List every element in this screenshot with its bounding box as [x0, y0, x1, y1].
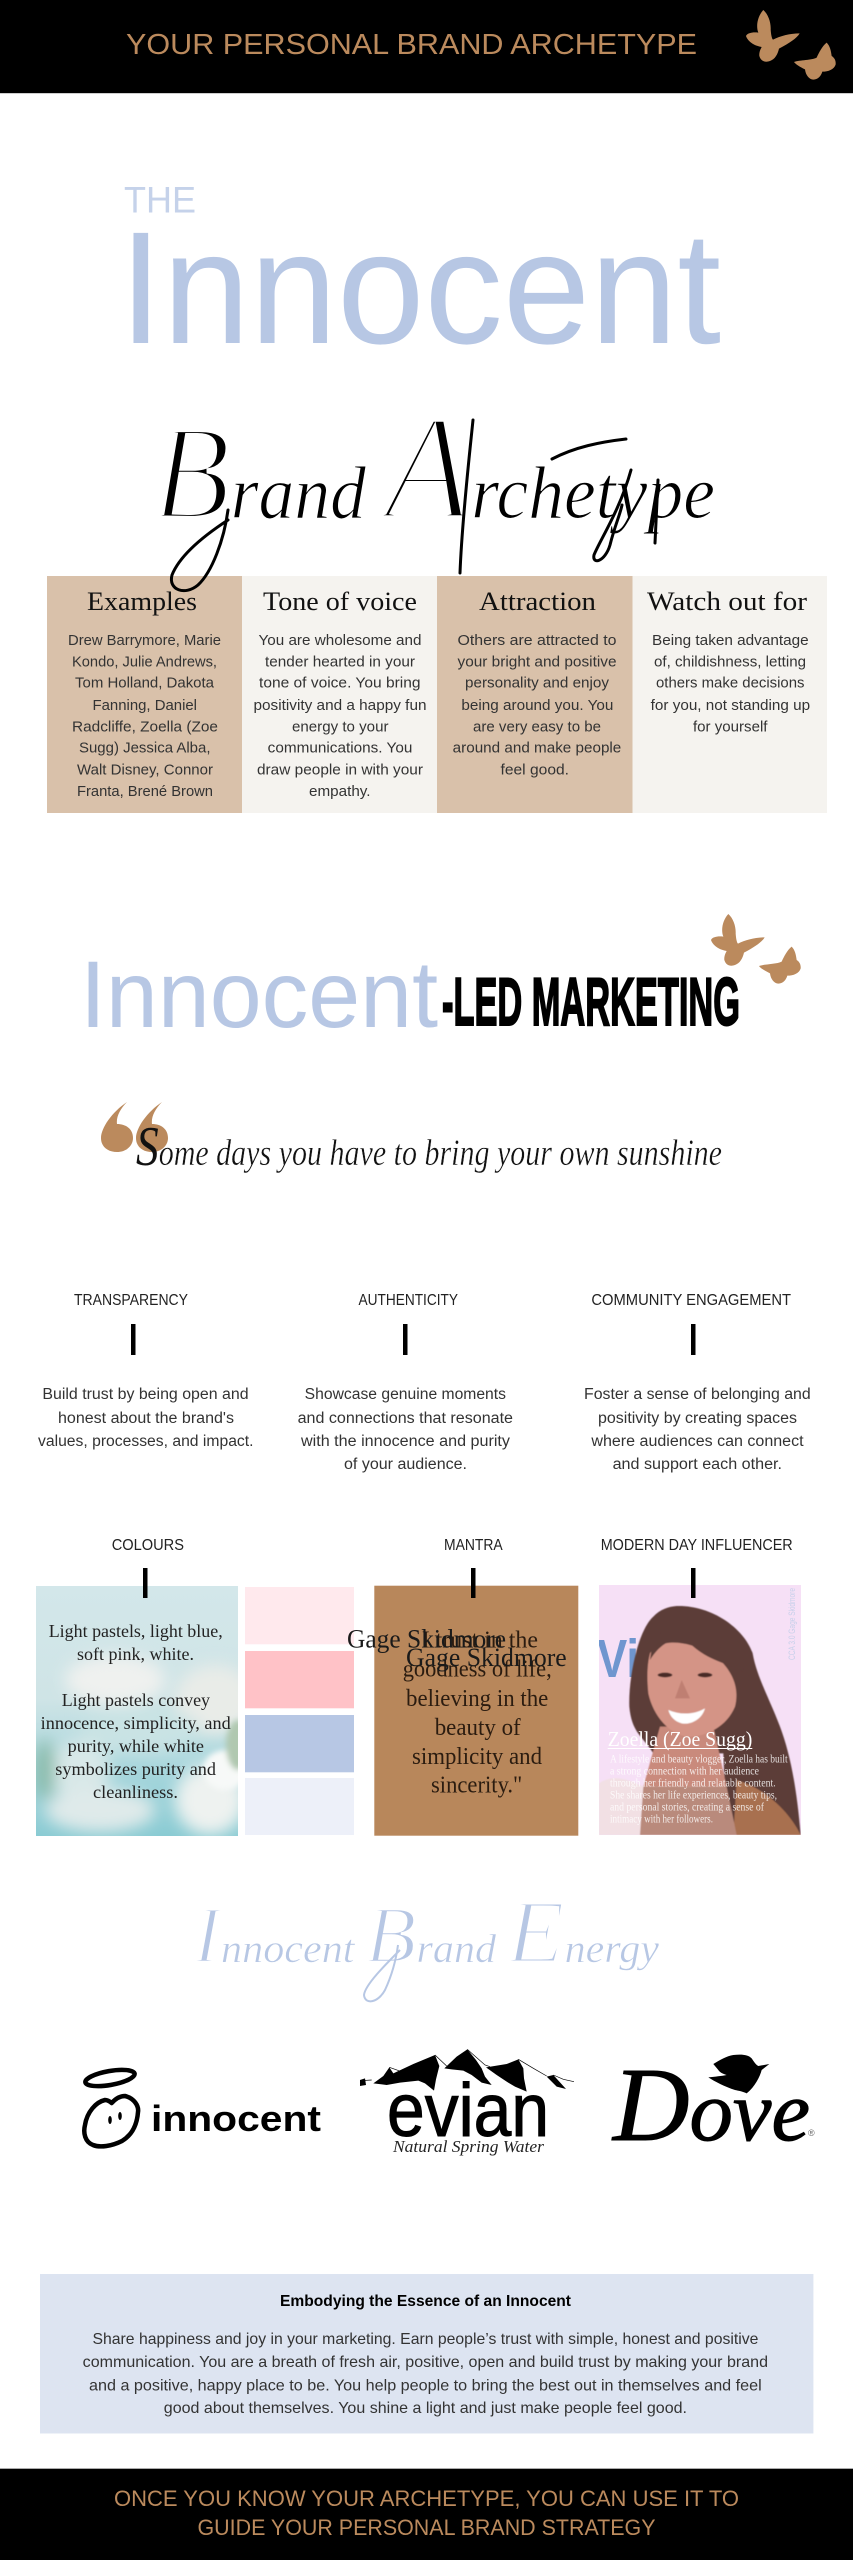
column: tone of voice: tender hearted in your	[265, 653, 415, 670]
panel body: communication. You are a breath of fresh air, positive, open and build trust by making your brand	[83, 2354, 768, 2371]
column: attraction: being around you. You	[461, 697, 613, 714]
colours text: Light pastels convey	[62, 1690, 210, 1710]
icon: butterflies	[711, 914, 801, 984]
dove bird	[708, 2055, 769, 2093]
panel: colours	[35, 1537, 354, 1836]
column: transparency: values, processes, and impact.	[38, 1433, 253, 1450]
column: tone of voice: tone of voice. You bring	[259, 675, 420, 692]
column: attraction: around and make people	[453, 740, 621, 757]
influencer description: and personal stories, creating a sense of	[610, 1802, 764, 1814]
logo: evian: Natural Spring Water	[392, 2137, 544, 2156]
column: tone of voice: draw people in with your	[257, 762, 423, 779]
column: watch out for: of, childishness, letting	[654, 653, 806, 670]
mantra text: goodness of life,	[403, 1657, 552, 1683]
column: attraction: your bright and positive	[458, 653, 616, 670]
colours text: innocence, simplicity, and	[41, 1713, 231, 1733]
footer banner	[0, 2468, 853, 2560]
colours text: Light pastels, light blue,	[49, 1621, 223, 1641]
column: watch out for	[647, 587, 810, 735]
colours text: soft pink, white.	[77, 1644, 194, 1664]
column: transparency: honest about the brand's	[58, 1410, 234, 1427]
heading: Innocent Brand Energy script: Innocent Brand Energy	[192, 1883, 659, 1982]
colours text: purity, while white	[68, 1736, 204, 1756]
column: tone of voice: positivity and a happy fun	[254, 697, 426, 714]
mantra text: believing in the	[406, 1686, 548, 1712]
column: tone of voice	[254, 587, 426, 800]
evian mountains	[360, 2049, 574, 2092]
column: tone of voice: empathy.	[309, 783, 370, 800]
column: authenticity: and connections that resonate	[298, 1410, 513, 1427]
column: authenticity: with the innocence and purity	[300, 1433, 510, 1450]
column: authenticity: Showcase genuine moments	[305, 1386, 506, 1403]
logo: innocent	[84, 2067, 321, 2146]
header banner	[0, 0, 853, 94]
column: community engagement: Foster a sense of belonging and	[584, 1386, 811, 1403]
influencer description	[610, 1754, 788, 1826]
column: examples: Franta, Brené Brown	[77, 783, 213, 800]
photo credit vertical: CCA 3.0 Gage Skidmore	[787, 1588, 797, 1660]
column: attraction: Attraction	[479, 587, 596, 616]
logo: evian: evian	[387, 2068, 549, 2152]
column: authenticity	[298, 1292, 513, 1473]
influencer description: through her friendly and relatable content.	[610, 1778, 776, 1790]
influencer description: She shares her life experiences, beauty tips,	[610, 1790, 777, 1802]
column: examples: Tom Holland, Dakota	[75, 675, 215, 692]
column: transparency: TRANSPARENCY	[74, 1292, 188, 1309]
column: examples: Fanning, Daniel	[92, 697, 197, 714]
colours text: cleanliness.	[93, 1782, 178, 1802]
influencer description: a strong connection with her audience	[610, 1766, 759, 1778]
icon: quote marks	[101, 1102, 168, 1152]
column: examples	[68, 587, 221, 800]
panel: embodying the essence	[40, 2274, 813, 2434]
column: examples: Kondo, Julie Andrews,	[72, 653, 217, 670]
column: examples: Sugg) Jessica Alba,	[79, 740, 210, 757]
photo: pastel flowers background	[35, 1586, 255, 1836]
logo: Dove: Dove	[611, 2046, 810, 2163]
column: watch out for: Being taken advantage	[652, 632, 809, 649]
column: tone of voice: You are wholesome and	[258, 632, 422, 649]
column: watch out for: Watch out for	[647, 587, 807, 616]
panel: mantra	[347, 1537, 578, 1836]
photo: portrait of Zoella: Vi	[597, 1629, 639, 1689]
panel title: Embodying the Essence of an Innocent	[280, 2293, 571, 2310]
column: tone of voice: communications. You	[268, 740, 412, 757]
column: authenticity: AUTHENTICITY	[358, 1292, 458, 1309]
mantra text: sincerity."	[431, 1773, 522, 1799]
footer text: GUIDE YOUR PERSONAL BRAND STRATEGY	[198, 2515, 656, 2540]
mantra text	[403, 1628, 552, 1799]
quote text: Some days you have to bring your own sunshine	[136, 1116, 722, 1178]
column: watch out for: others make decisions	[656, 675, 804, 692]
heading: Innocent-led marketing: Innocent	[80, 942, 438, 1048]
panel body: good about themselves. You shine a light and just make people feel good.	[164, 2400, 687, 2417]
photo: portrait of Zoella	[597, 1585, 801, 1835]
influencer name: Zoella (Zoe Sugg)	[608, 1727, 752, 1751]
photo credits overlaid: Gage Skidmore	[347, 1625, 506, 1654]
colours text: symbolizes purity and	[55, 1759, 216, 1779]
flourishes of the script heading	[171, 420, 658, 591]
panel body: Share happiness and joy in your marketing. Earn people’s trust with simple, honest and positive	[92, 2331, 759, 2348]
column: authenticity: of your audience.	[344, 1456, 467, 1473]
panel body: and a positive, happy place to be. You help people to bring the best out in themselves and feel	[89, 2378, 762, 2395]
column: attraction: Others are attracted to	[458, 632, 616, 649]
influencer description: A lifestyle and beauty vlogger, Zoella has built	[610, 1754, 788, 1766]
panel: archetype table	[47, 576, 827, 813]
title: The Innocent: THE	[124, 180, 196, 220]
column: attraction	[453, 587, 621, 779]
influencer label: MODERN DAY INFLUENCER	[601, 1537, 793, 1554]
column: attraction: personality and enjoy	[465, 675, 610, 692]
title: The Innocent: Innocent	[119, 198, 721, 377]
heading: Innocent-led marketing	[80, 942, 740, 1048]
panel body	[83, 2331, 768, 2417]
column: examples: Radcliffe, Zoella (Zoe	[72, 718, 218, 735]
mantra text: simplicity and	[412, 1744, 542, 1770]
column: attraction: feel good.	[500, 762, 569, 779]
colours label: COLOURS	[112, 1537, 184, 1554]
influencer description: intimacy with her followers.	[610, 1814, 713, 1826]
colours text	[41, 1621, 231, 1802]
footer text	[114, 2486, 739, 2540]
mantra text: beauty of	[435, 1715, 521, 1741]
column: transparency	[38, 1292, 253, 1450]
colours connector	[143, 1568, 148, 1598]
column: tone of voice: energy to your	[292, 718, 389, 735]
column: watch out for: for you, not standing up	[651, 697, 810, 714]
photo credits overlaid: Gage Skidmore	[406, 1643, 567, 1672]
heading: Brand Archetype script: Brand Archetype	[152, 385, 715, 551]
colour swatches	[245, 1587, 354, 1835]
column: examples: Drew Barrymore, Marie	[68, 632, 221, 649]
mantra text: I trust in the	[422, 1628, 538, 1654]
header title: YOUR PERSONAL BRAND ARCHETYPE	[126, 29, 697, 61]
column: examples: Walt Disney, Connor	[77, 762, 213, 779]
column: community engagement: and support each other.	[613, 1456, 782, 1473]
photo credits overlaid	[347, 1625, 567, 1672]
column: attraction: are very easy to be	[473, 718, 601, 735]
column: community engagement: positivity by creating spaces	[598, 1410, 797, 1427]
mantra label: MANTRA	[444, 1537, 503, 1554]
column: watch out for: for yourself	[693, 718, 768, 735]
footer text: ONCE YOU KNOW YOUR ARCHETYPE, YOU CAN USE IT TO	[114, 2486, 739, 2511]
column: community engagement	[584, 1292, 811, 1473]
flourish of the energy heading	[364, 1945, 400, 2001]
logo: Dove: ®	[808, 2128, 815, 2138]
column: community engagement: where audiences can connect	[590, 1433, 804, 1450]
column: examples: Examples	[87, 587, 197, 616]
logo: innocent: innocent	[151, 2098, 321, 2139]
column: tone of voice: Tone of voice	[263, 587, 417, 616]
panel: modern day influencer	[597, 1537, 801, 1835]
logo: evian	[360, 2049, 574, 2156]
column: transparency: Build trust by being open and	[42, 1386, 249, 1403]
column: community engagement: COMMUNITY ENGAGEMENT	[591, 1292, 791, 1309]
icon: header butterflies	[746, 10, 836, 80]
